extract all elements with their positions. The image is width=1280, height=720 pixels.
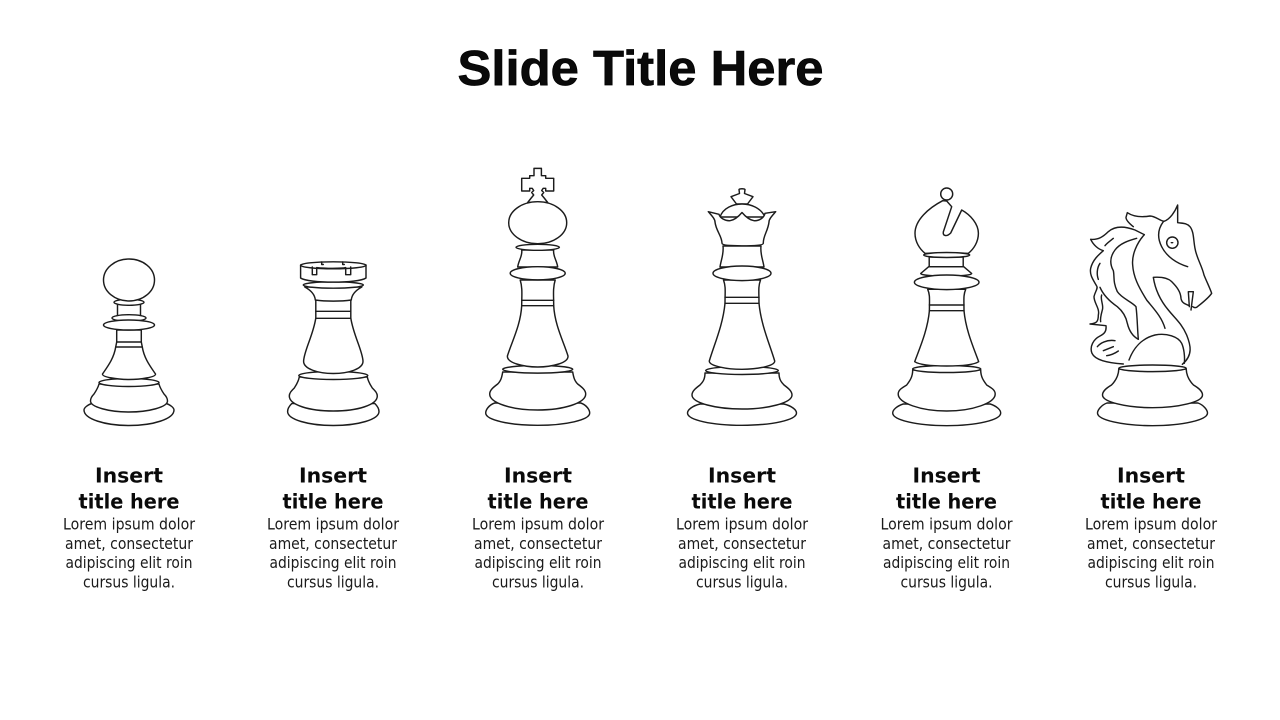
text block: pawn: title here xyxy=(78,490,180,514)
text block: queen: cursus ligula. xyxy=(696,573,788,592)
text block: queen: title here xyxy=(692,490,792,514)
text block: pawn xyxy=(63,464,195,592)
text block: knight: Insert xyxy=(1117,464,1185,488)
text block: knight: title here xyxy=(1100,490,1202,514)
text block: pawn: adipiscing elit roin xyxy=(66,553,192,572)
text block: bishop xyxy=(880,464,1013,592)
text block: rook: adipiscing elit roin xyxy=(270,553,396,572)
icon: bishop xyxy=(893,188,1001,426)
icon: queen xyxy=(688,189,796,425)
text block: king: amet, consectetur xyxy=(474,534,602,553)
text block: rook: cursus ligula. xyxy=(287,573,379,592)
icon: pawn xyxy=(84,259,174,426)
text block: bishop: cursus ligula. xyxy=(900,573,992,592)
text block: pawn: amet, consectetur xyxy=(65,534,193,553)
text block: king: Lorem ipsum dolor xyxy=(472,514,604,534)
icon: knight xyxy=(1090,205,1212,426)
text block: queen xyxy=(676,464,808,592)
text block: knight: amet, consectetur xyxy=(1087,534,1215,553)
text block: bishop: amet, consectetur xyxy=(882,534,1011,553)
text block: rook xyxy=(267,464,399,592)
text block: queen: adipiscing elit roin xyxy=(678,553,806,572)
text block: rook: Lorem ipsum dolor xyxy=(267,514,399,534)
text block: queen: Lorem ipsum dolor xyxy=(676,514,808,534)
text block: king: Insert xyxy=(504,464,572,488)
text block: knight: cursus ligula. xyxy=(1105,573,1197,592)
title: Slide Title Here xyxy=(458,42,824,96)
text block: queen: amet, consectetur xyxy=(678,534,806,553)
text block: knight: adipiscing elit roin xyxy=(1088,553,1214,572)
text block: pawn: Lorem ipsum dolor xyxy=(63,514,195,534)
text block: bishop: Insert xyxy=(912,464,981,488)
text block: knight xyxy=(1085,464,1217,592)
text block: rook: amet, consectetur xyxy=(269,534,397,553)
text block: queen: Insert xyxy=(708,464,776,488)
icon: rook xyxy=(288,262,379,426)
text block: king: adipiscing elit roin xyxy=(474,553,602,572)
text block: rook: title here xyxy=(282,490,384,514)
text block: king xyxy=(472,464,604,592)
icon: king xyxy=(486,168,590,425)
text block: bishop: adipiscing elit roin xyxy=(883,553,1010,572)
text block: knight: Lorem ipsum dolor xyxy=(1085,514,1217,534)
text block: pawn: Insert xyxy=(95,464,163,488)
text block: rook: Insert xyxy=(299,464,367,488)
text block: pawn: cursus ligula. xyxy=(83,573,175,592)
text block: bishop: Lorem ipsum dolor xyxy=(880,514,1013,534)
text block: bishop: title here xyxy=(896,490,997,514)
text block: king: cursus ligula. xyxy=(492,573,584,592)
text block: king: title here xyxy=(488,490,588,514)
